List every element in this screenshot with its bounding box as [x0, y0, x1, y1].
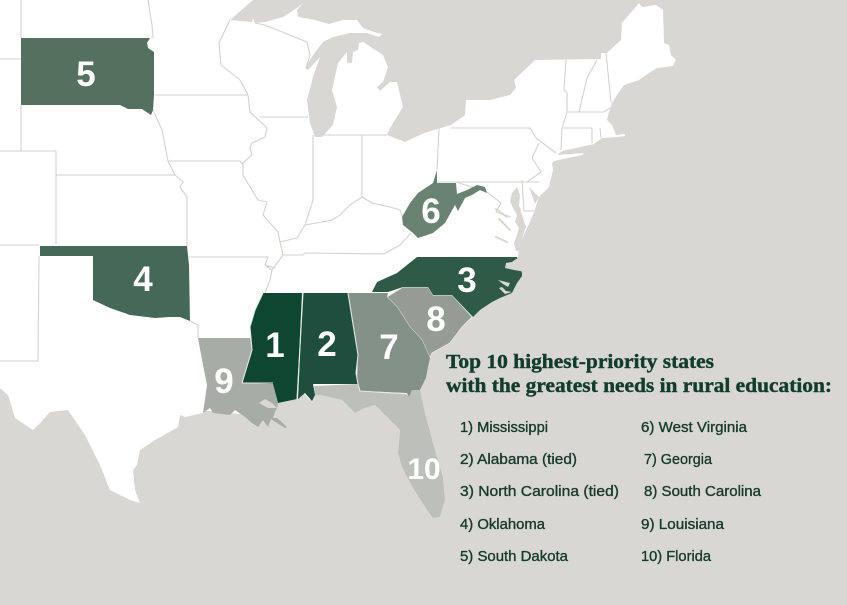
ranked list: states 6 to 10: 10) Florida — [641, 549, 712, 565]
ranked list: states 6 to 10: 8) South Carolina — [644, 484, 762, 500]
number 10: 10 — [407, 453, 441, 486]
heading: Top 10 highest-priority states — [446, 352, 714, 373]
state 7: Georgia — [348, 293, 430, 397]
number 4: 4 — [133, 260, 153, 299]
state 8: South Carolina — [387, 287, 472, 358]
number 3: 3 — [457, 261, 477, 300]
ranked list: states 1 to 5: 5) South Dakota — [460, 549, 569, 565]
number 6: 6 — [421, 192, 441, 231]
number 1: 1 — [265, 326, 285, 365]
ranked list: states 6 to 10: 6) West Virginia — [641, 420, 748, 436]
ranked list: states 6 to 10: 9) Louisiana — [641, 517, 725, 533]
state 5: South Dakota — [21, 38, 154, 115]
ranked list: states 6 to 10 — [641, 420, 762, 565]
ranked list: states 1 to 5 — [460, 420, 619, 565]
number 7: 7 — [379, 328, 399, 367]
number 9: 9 — [214, 362, 234, 401]
state 3: North Carolina — [372, 257, 526, 317]
Lake Pontchartrain — [259, 399, 277, 408]
state 4: Oklahoma — [40, 246, 190, 321]
state 10: Florida — [314, 384, 445, 518]
ranked list: states 1 to 5: 3) North Carolina (tied) — [460, 484, 619, 500]
state 6: West Virginia — [402, 170, 487, 238]
ranked list: states 1 to 5: 2) Alabama (tied) — [460, 452, 577, 468]
state 9: Louisiana — [198, 338, 287, 428]
map: white land mass of the eastern United States — [0, 0, 676, 518]
heading — [446, 352, 832, 397]
borders between southern states — [242, 293, 407, 399]
number 2: 2 — [317, 325, 337, 364]
state 2: Alabama — [298, 293, 358, 401]
Pamlico Sound inlets — [498, 258, 526, 294]
ranked list: states 1 to 5: 1) Mississippi — [460, 420, 548, 436]
heading: with the greatest needs in rural education: — [446, 376, 832, 397]
ranked list: states 6 to 10: 7) Georgia — [644, 452, 713, 468]
number 5: 5 — [76, 55, 96, 94]
state 1: Mississippi — [242, 293, 302, 403]
number 8: 8 — [426, 300, 446, 339]
ranked list: states 1 to 5: 4) Oklahoma — [460, 517, 546, 533]
Chesapeake and Delaware bays — [496, 187, 539, 251]
state borders — [0, 0, 611, 361]
